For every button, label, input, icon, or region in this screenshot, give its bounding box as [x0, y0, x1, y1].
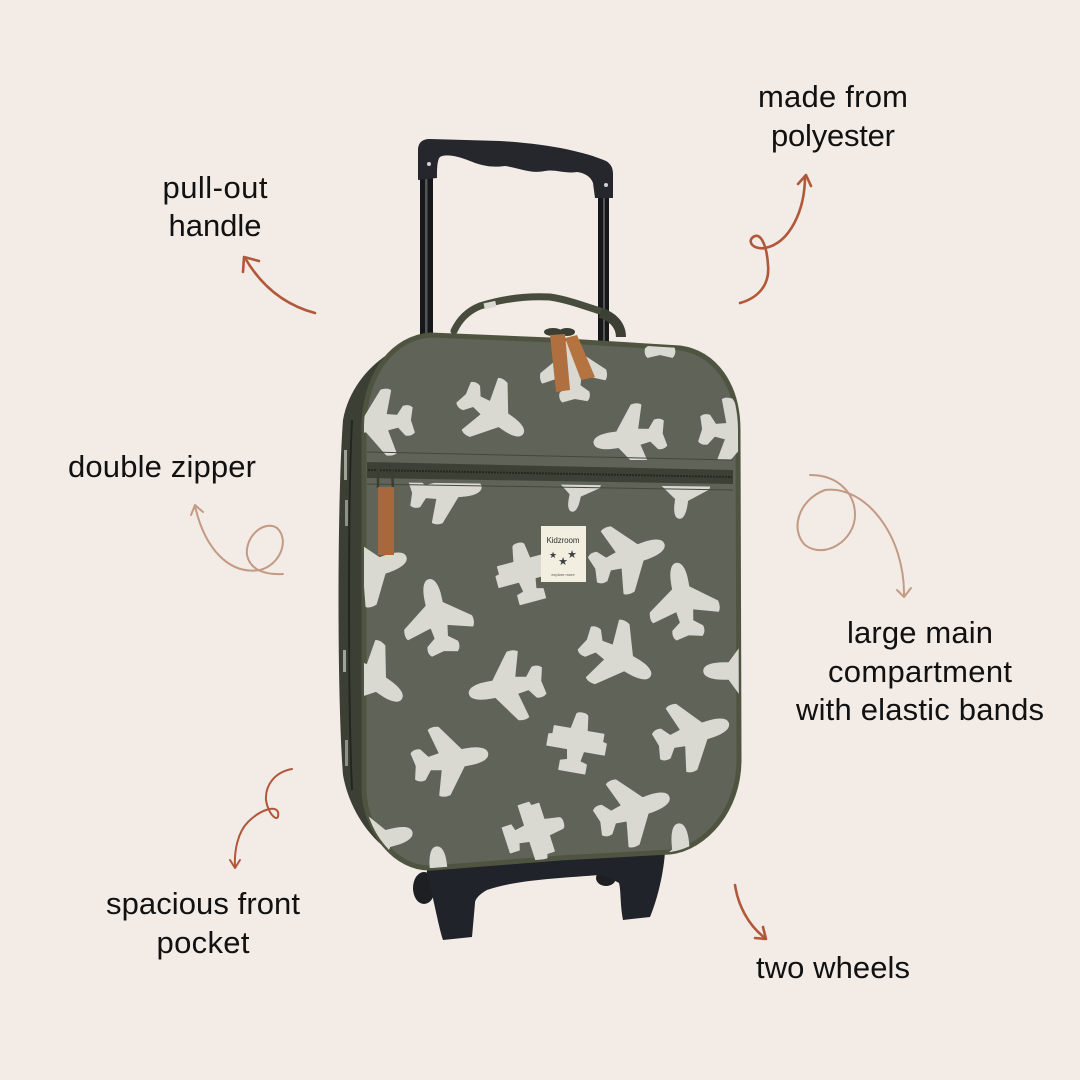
label: made from polyester	[758, 79, 908, 153]
brand label: ★	[549, 550, 557, 560]
wheels	[413, 852, 665, 940]
arrow: to spacious front pocket	[230, 769, 292, 868]
label: pull-out handle: handle	[168, 208, 262, 243]
side gusset	[338, 338, 430, 868]
suitcase	[338, 139, 742, 940]
telescopic poles	[420, 176, 609, 342]
label: made from polyester: made from	[758, 79, 908, 114]
label: two wheels: two wheels	[756, 950, 910, 985]
label: made from polyester: polyester	[771, 118, 895, 153]
arrow: to double zipper	[191, 505, 283, 574]
arrow: to made from polyester	[740, 175, 811, 303]
label: large main compartment with elastic bands: with elastic bands	[795, 692, 1044, 727]
label: double zipper: double zipper	[68, 449, 256, 484]
arrow: to two wheels	[735, 885, 766, 939]
plane pattern: front pocket	[364, 482, 739, 868]
plane pattern: upper panel	[364, 341, 738, 460]
brand label	[541, 526, 586, 582]
carry handle	[454, 297, 621, 337]
label: pull-out handle	[162, 170, 268, 243]
infographic canvas	[69, 85, 1043, 978]
label: spacious front pocket: pocket	[156, 925, 250, 960]
brand label: ★	[567, 549, 577, 561]
arrow: to pull-out handle	[243, 257, 315, 313]
pocket zipper pull	[378, 464, 394, 555]
label: pull-out handle: pull-out	[162, 170, 268, 205]
brand label: ★	[558, 556, 568, 568]
brand label: explore more	[551, 572, 575, 577]
arrow: to large main compartment	[798, 475, 911, 597]
label: large main compartment with elastic bands	[795, 615, 1044, 727]
label: large main compartment with elastic bands: large main	[847, 615, 993, 650]
label: spacious front pocket: spacious front	[106, 886, 300, 921]
brand label: Kidzroom	[546, 536, 580, 545]
main zipper tabs	[544, 328, 595, 392]
label: large main compartment with elastic bands: compartment	[828, 654, 1012, 689]
front panel	[364, 335, 739, 868]
pocket zipper	[367, 452, 733, 490]
label: spacious front pocket	[106, 886, 300, 960]
pull-out handle	[418, 139, 613, 198]
